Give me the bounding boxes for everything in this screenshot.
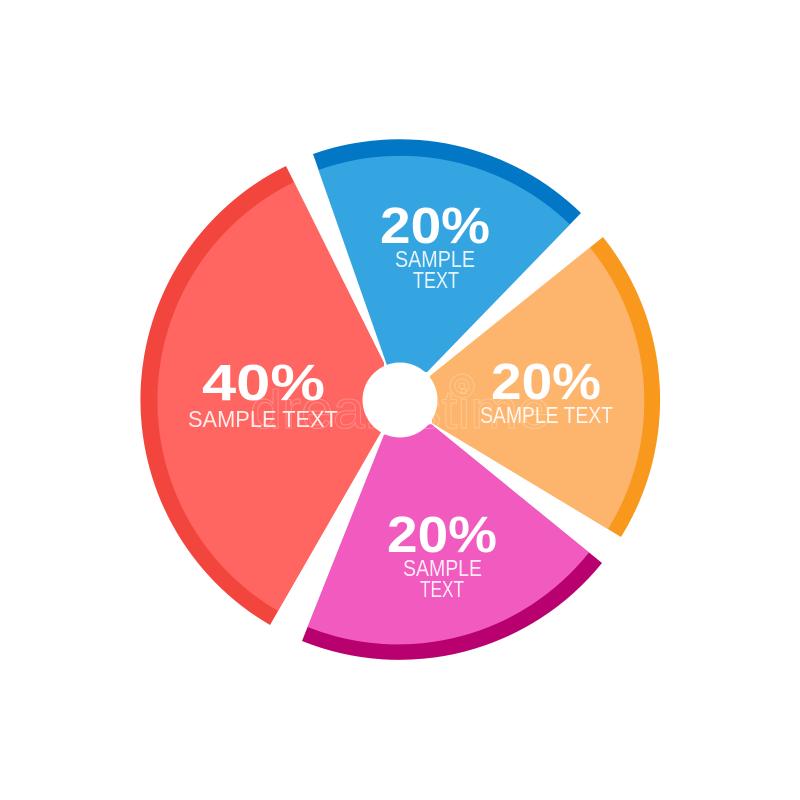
panel: pink segment 20%: SAMPLE — [403, 555, 482, 581]
panel: pink segment 20%: TEXT — [420, 576, 464, 602]
watermark: dreamstime — [250, 380, 550, 440]
panel: orange segment 20%: SAMPLE TEXT — [480, 402, 613, 428]
panel: pink segment 20%: 20% — [387, 506, 497, 563]
panel: blue segment 20%: TEXT — [413, 267, 459, 293]
panel: red segment 40%: SAMPLE TEXT — [188, 406, 338, 432]
panel: blue segment 20%: SAMPLE — [395, 246, 475, 272]
panel: red segment 40%: 40% — [202, 354, 325, 411]
panel: orange segment 20% — [430, 237, 660, 537]
panel: pink segment 20% — [302, 424, 602, 660]
center hole — [362, 362, 438, 438]
panel: blue segment 20%: 20% — [380, 197, 490, 254]
panel: orange segment 20%: 20% — [491, 353, 601, 410]
panel: blue segment 20% — [313, 139, 581, 372]
panel: red segment 40% — [140, 166, 384, 625]
